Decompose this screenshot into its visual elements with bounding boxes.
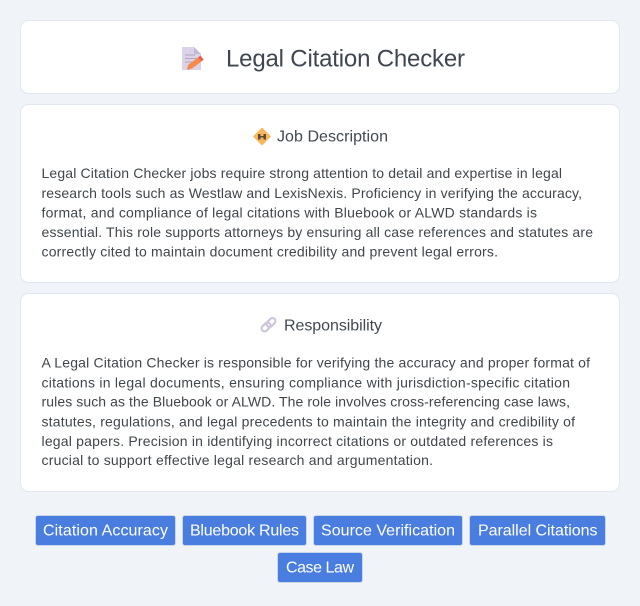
icon: orange diamond — [254, 128, 270, 144]
tag: parallel citations — [470, 516, 606, 546]
text block: responsibility: citations in legal documents, ensuring compliance with jurisdiction-specific citation — [42, 374, 570, 390]
tag: source verification — [314, 516, 462, 546]
text block: job description: essential. This role supports attorneys by ensuring all case references and statutes are — [42, 224, 593, 240]
text block: job description: Legal Citation Checker jobs require strong attention to detail and expertise in legal — [42, 165, 562, 181]
tag: case law — [278, 552, 362, 582]
text block: responsibility: crucial to support effective legal research and argumentation. — [42, 452, 433, 468]
text block: responsibility: rules such as the Bluebook or ALWD. The role involves cross-referencing case laws, — [42, 394, 570, 410]
title: Legal Citation Checker — [226, 46, 465, 72]
icon: chain link — [260, 317, 277, 333]
tag: case law: Case Law — [286, 560, 354, 576]
panel: responsibility — [20, 294, 620, 492]
text block: job description: format, and compliance of legal citations with Bluebook or ALWD standards is — [42, 204, 537, 220]
text block: responsibility — [42, 354, 590, 468]
heading: job description: Job Description — [277, 128, 388, 146]
text block: job description: research tools such as Westlaw and LexisNexis. Proficiency in verifying the accuracy, — [42, 185, 582, 201]
tag: citation accuracy: Citation Accuracy — [43, 522, 168, 540]
text block: responsibility: statutes, regulations, and legal precedents to maintain the integrity and credibility of — [42, 414, 575, 430]
tags — [36, 516, 606, 582]
tag: bluebook rules: Bluebook Rules — [190, 522, 299, 540]
tag: source verification: Source Verification — [321, 522, 455, 540]
tag: bluebook rules — [182, 516, 306, 546]
text block: responsibility: A Legal Citation Checker is responsible for verifying the accuracy and proper format of — [42, 354, 590, 370]
text block: job description: correctly cited to maintain document credibility and prevent legal errors. — [42, 244, 498, 260]
panel: job description — [20, 104, 620, 282]
tag: citation accuracy — [36, 516, 176, 546]
panel: header — [20, 20, 620, 94]
heading: responsibility: Responsibility — [284, 318, 382, 334]
text block: job description — [42, 165, 593, 260]
icon: document with pencil — [182, 47, 204, 70]
tag: parallel citations: Parallel Citations — [478, 522, 598, 540]
text block: responsibility: legal papers. Precision in identifying incorrect citations or outdated references is — [42, 433, 553, 449]
